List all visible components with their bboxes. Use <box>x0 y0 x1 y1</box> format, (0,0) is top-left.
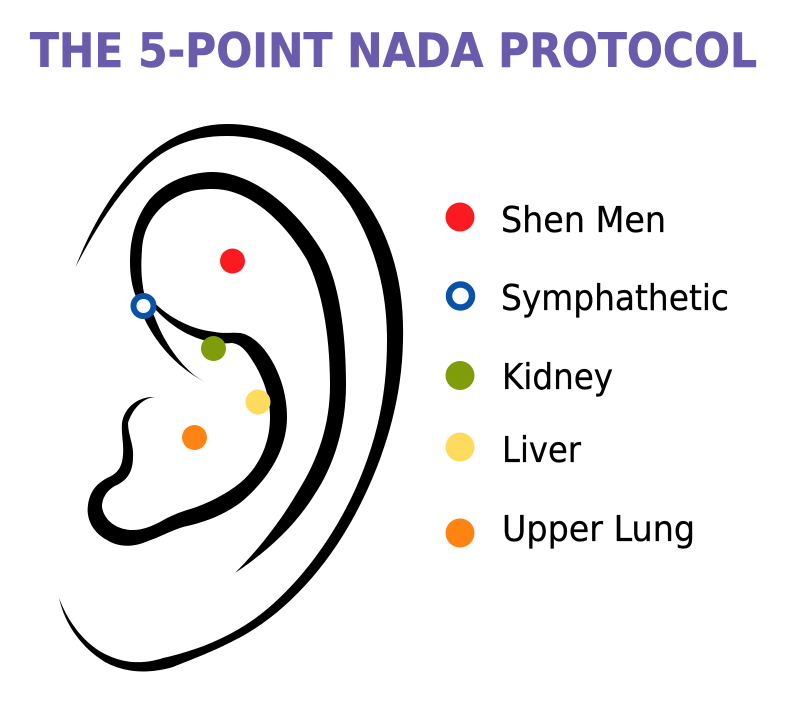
legend item: Symphathetic: Symphathetic <box>501 278 729 319</box>
point: Shen Men on ear <box>220 248 245 274</box>
ear outer helix line <box>59 124 403 671</box>
point: Upper Lung on ear <box>182 425 207 450</box>
legend item: Kidney: Kidney <box>502 357 613 398</box>
legend item: Kidney <box>446 357 613 398</box>
point: Kidney on ear <box>201 336 226 361</box>
legend item: Upper Lung: Upper Lung <box>502 509 695 550</box>
ear illustration <box>59 124 403 671</box>
legend item: Shen Men: Shen Men <box>501 200 666 241</box>
legend <box>446 200 729 550</box>
point: Liver on ear <box>246 390 270 414</box>
ear inner fold line <box>130 172 346 573</box>
legend item: Liver: Liver <box>502 430 581 471</box>
point: Symphathetic on ear <box>134 296 154 316</box>
legend item: Liver <box>446 430 581 471</box>
ear concha and lobe line <box>88 298 287 546</box>
